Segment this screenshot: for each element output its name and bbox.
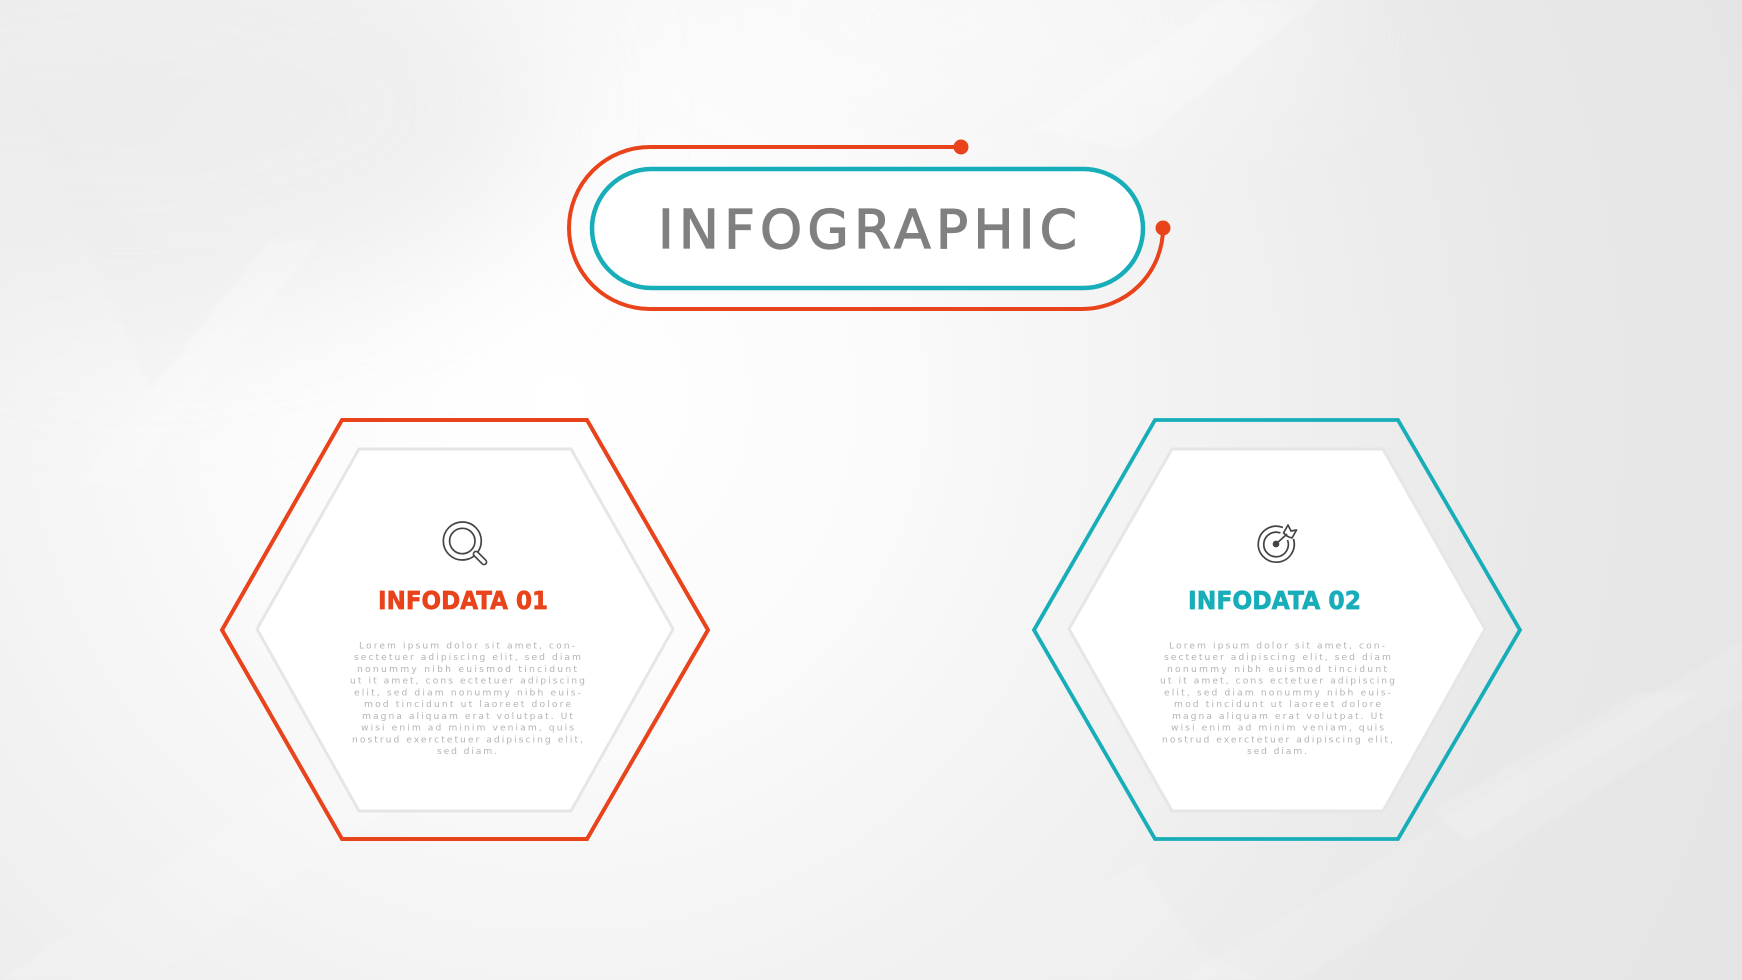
orange outer line with end dots	[569, 140, 1170, 309]
body text	[1160, 640, 1395, 757]
body text: magna aliquam erat volutpat. Ut	[362, 711, 573, 722]
body text: elit, sed diam nonummy nibh euis-	[1164, 688, 1391, 698]
body text: mod tincidunt ut laoreet dolore	[1174, 699, 1381, 710]
heading: INFODATA 01	[378, 586, 548, 615]
body text: nonummy nibh euismod tincidunt	[1167, 664, 1387, 675]
body text: nostrud exerctetuer adipiscing elit,	[352, 734, 583, 746]
inner white hexagon	[1069, 449, 1485, 811]
body text: ut it amet, cons ectetuer adipiscing	[1160, 676, 1395, 686]
body text: mod tincidunt ut laoreet dolore	[364, 699, 571, 710]
body text: sectetuer adipiscing elit, sed diam	[354, 652, 581, 663]
body text	[350, 640, 585, 757]
teal pill	[592, 169, 1143, 288]
body text: Lorem ipsum dolor sit amet, con-	[1169, 640, 1385, 652]
orange hexagon outline	[222, 420, 708, 839]
body text: ut it amet, cons ectetuer adipiscing	[350, 676, 585, 686]
heading: INFODATA 02	[1188, 586, 1361, 615]
panel: infodata 01	[222, 420, 708, 839]
body text: sed diam.	[1247, 746, 1307, 757]
body text: sed diam.	[437, 746, 497, 757]
inner white hexagon	[257, 449, 673, 811]
body text: nonummy nibh euismod tincidunt	[357, 664, 577, 675]
title text: INFOGRAPHIC	[658, 198, 1077, 261]
body text: Lorem ipsum dolor sit amet, con-	[359, 640, 575, 652]
icon: target with arrow	[1258, 525, 1296, 562]
panel: infodata 02	[1034, 420, 1520, 839]
teal hexagon outline	[1034, 420, 1520, 839]
title badge	[569, 140, 1170, 309]
body text: sectetuer adipiscing elit, sed diam	[1164, 652, 1391, 663]
body text: magna aliquam erat volutpat. Ut	[1172, 711, 1383, 722]
icon: magnifying glass	[443, 522, 484, 562]
body text: wisi enim ad minim veniam, quis	[1171, 722, 1384, 734]
body text: nostrud exerctetuer adipiscing elit,	[1162, 734, 1393, 746]
body text: elit, sed diam nonummy nibh euis-	[354, 688, 581, 698]
body text: wisi enim ad minim veniam, quis	[361, 722, 574, 734]
